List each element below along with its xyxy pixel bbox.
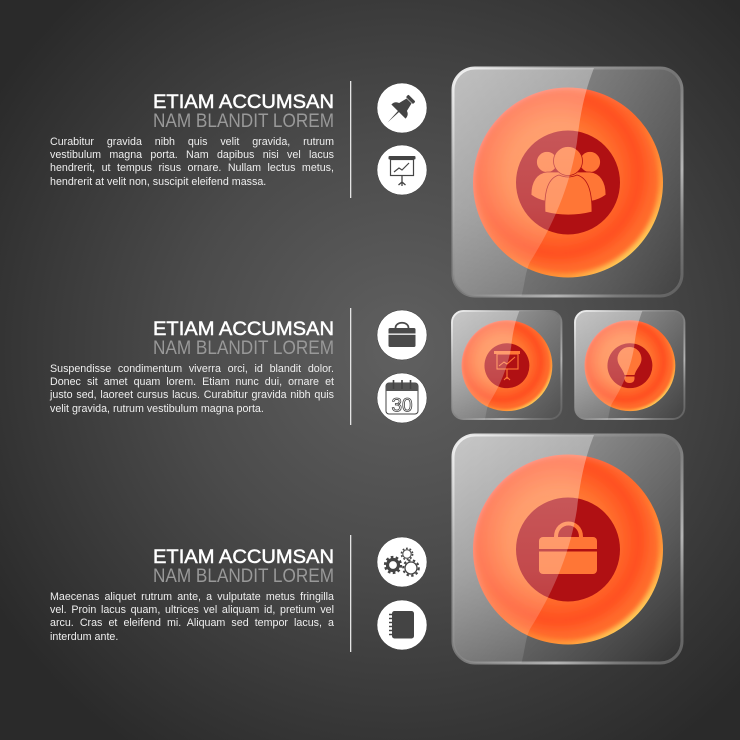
- panel: small tile with chart icon: [452, 311, 561, 421]
- body text: section two: justo sed, laoreet cursus lacus. Curabitur gravida nibh quis: [50, 389, 334, 401]
- divider: middle: [350, 308, 351, 425]
- panel: small tile with bulb icon: [575, 311, 684, 421]
- icon disc: [516, 130, 620, 234]
- body text: section two: [50, 362, 334, 415]
- icon disc: [607, 343, 652, 388]
- heading: section three: [153, 547, 334, 587]
- icon: briefcase: [539, 524, 597, 574]
- body text: section one: hendrerit at velit non, suscipit eleifend massa.: [50, 176, 266, 188]
- body text: section two: Donec sit amet quam lorem. Etiam nunc dui, ornare et: [50, 376, 334, 388]
- icon: team of people: [531, 146, 606, 215]
- icon disc: [516, 498, 620, 602]
- glass highlight: [453, 68, 594, 298]
- icon disc: [484, 343, 529, 388]
- icon: briefcase: [377, 310, 427, 360]
- icon: light bulb: [617, 347, 641, 383]
- body text: section two: velit gravida, rutrum vestibulum magna porta.: [50, 403, 264, 415]
- glass highlight: [452, 311, 519, 421]
- orange sphere: [473, 454, 663, 644]
- orange sphere: [473, 88, 663, 278]
- body text: section three: vel. Proin lacus quam, ultrices vel aliquam id, pretium vel: [50, 604, 334, 616]
- body text: section three: Maecenas aliquet rutrum ante, a vulputate metus fringilla: [50, 590, 334, 602]
- body text: section three: arcu. Cras et eleifend mi. Aliquam sed tempor lacus, a: [50, 617, 334, 629]
- icon: calendar: [377, 373, 427, 423]
- text block: section two: [50, 319, 334, 415]
- icon: push pin: [377, 83, 427, 133]
- orange sphere: [462, 320, 552, 411]
- text block: section three: [50, 547, 334, 643]
- body text: section one: hendrerit, ut tempus risus ornare. Nullam lectus metus,: [50, 162, 334, 174]
- icon: gears: [377, 537, 427, 587]
- body text: section three: interdum ante.: [50, 631, 118, 643]
- glass highlight: [453, 435, 594, 665]
- icon: calendar: 30: [391, 396, 413, 416]
- body text: section three: [50, 590, 334, 643]
- divider: top: [350, 81, 351, 198]
- body text: section one: vestibulum magna porta. Nam dapibus nisi vel lacus: [50, 149, 334, 161]
- icon: notebook: [377, 600, 427, 650]
- heading: section one: [153, 92, 334, 132]
- panel: large tile with briefcase icon: [453, 435, 682, 665]
- text block: section one: [50, 92, 334, 188]
- panel: large tile with team icon: [453, 68, 682, 298]
- icon: presentation board: [377, 145, 427, 195]
- icon: presentation board: [494, 351, 520, 380]
- divider: bottom: [350, 535, 351, 652]
- glass highlight: [575, 311, 642, 421]
- body text: section one: [50, 136, 334, 188]
- body text: section two: Suspendisse condimentum viverra orci, id blandit dolor.: [50, 362, 334, 374]
- body text: section one: Curabitur gravida nibh quis velit gravida, rutrum: [50, 136, 334, 148]
- orange sphere: [585, 320, 675, 411]
- heading: section two: [153, 319, 334, 359]
